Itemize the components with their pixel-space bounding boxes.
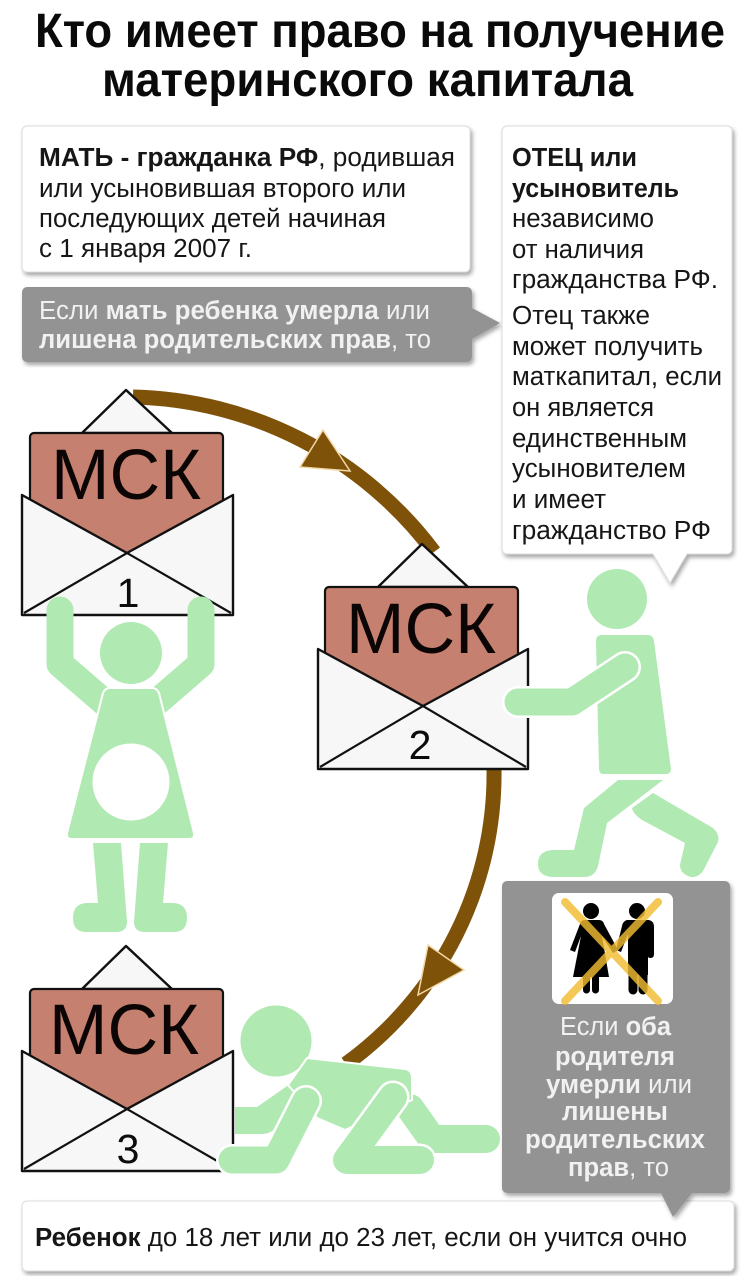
panel: both parents callout: родителя [555,1043,675,1071]
envelope 2 [318,544,528,769]
envelope 3: МСК [49,991,199,1070]
panel: father eligibility: единственным [512,425,687,453]
panel: father eligibility: ОТЕЦ или [512,144,637,172]
panel: both parents callout [502,881,730,1217]
panel: father eligibility: усыновителем [512,455,686,483]
panel: both parents callout: Если оба [560,1013,672,1041]
title: Кто имеет право на получение [35,5,725,58]
panel: father eligibility: может получить [512,333,703,361]
panel: both parents callout: родительских [525,1126,705,1154]
figure: pregnant mother [60,610,201,932]
panel: father eligibility: маткапитал, если [512,363,722,391]
panel: father eligibility: Отец также [512,302,650,330]
panel: mother eligibility: последующих детей начиная [39,205,386,233]
envelope 1: МСК [51,436,201,515]
panel: father eligibility: от наличия [512,236,644,264]
arrow: father to child [346,768,494,1064]
envelope 2: 2 [409,722,431,768]
envelope 1 [22,390,233,616]
panel: mother eligibility [22,126,470,272]
title: материнского капитала [102,54,633,107]
panel: father eligibility: гражданство РФ [512,517,711,545]
panel: father eligibility: и имеет [512,486,606,514]
envelope 2: МСК [346,590,496,669]
envelope 1: 1 [117,570,139,616]
panel: father eligibility [502,126,732,583]
panel: mother died callout [22,287,500,362]
panel: both parents callout: прав, то [568,1154,669,1182]
panel: both parents callout: умерли или [546,1071,692,1099]
title [35,5,725,107]
panel: father eligibility: независимо [512,205,654,233]
panel: father eligibility: он является [512,394,654,422]
panel: mother eligibility: МАТЬ - гражданка РФ , родившая [39,144,455,172]
figure: father [518,569,718,877]
panel: father eligibility: гражданства РФ. [512,266,718,294]
envelope 3: 3 [117,1126,139,1172]
figure: crawling child [232,1006,486,1160]
icon: crossed-out parents [552,893,673,1004]
panel: mother died callout: Если мать ребенка умерла или [39,297,430,325]
arrow: mother to father [133,397,434,552]
envelope 3 [22,946,233,1172]
panel: both parents callout: лишены [562,1098,668,1126]
panel: mother eligibility: с 1 января 2007 г. [39,235,252,263]
panel: mother died callout: лишена родительских прав, то [39,326,431,354]
panel: father eligibility: усыновитель [512,175,679,203]
panel: child result: Ребенок до 18 лет или до 23 лет, если он учится очно [35,1224,687,1252]
panel: mother eligibility: или усыновившая второго или [39,175,406,203]
panel: child result [22,1201,734,1271]
